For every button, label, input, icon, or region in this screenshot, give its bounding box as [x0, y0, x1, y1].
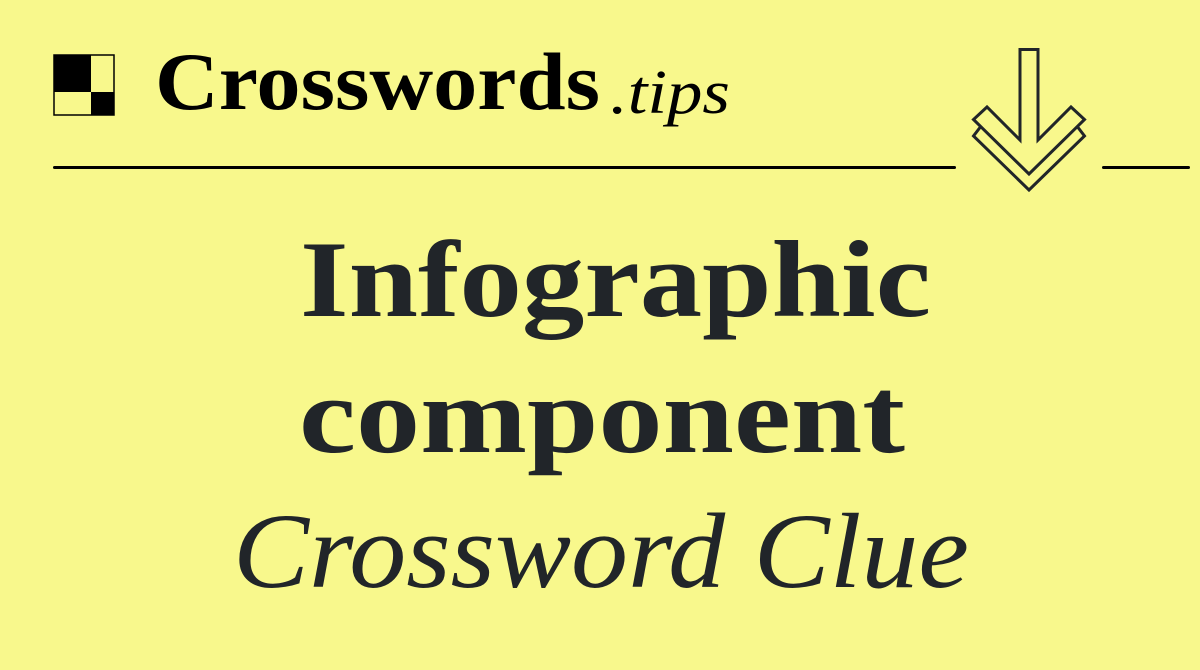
subheading: Crossword Clue: Crossword Clue: [233, 493, 969, 611]
heading: Infographic component: component: [299, 355, 905, 476]
logo suffix: .tips: .tips: [610, 59, 730, 127]
icon: down arrow: [974, 50, 1084, 190]
icon: crossword grid logo: [54, 55, 114, 115]
heading: Infographic component: [299, 219, 931, 476]
header rule right: [1102, 166, 1190, 169]
heading: Infographic component: Infographic: [300, 219, 931, 340]
logo wordmark: Crosswords: Crosswords: [155, 36, 600, 127]
header rule left: [53, 166, 956, 169]
